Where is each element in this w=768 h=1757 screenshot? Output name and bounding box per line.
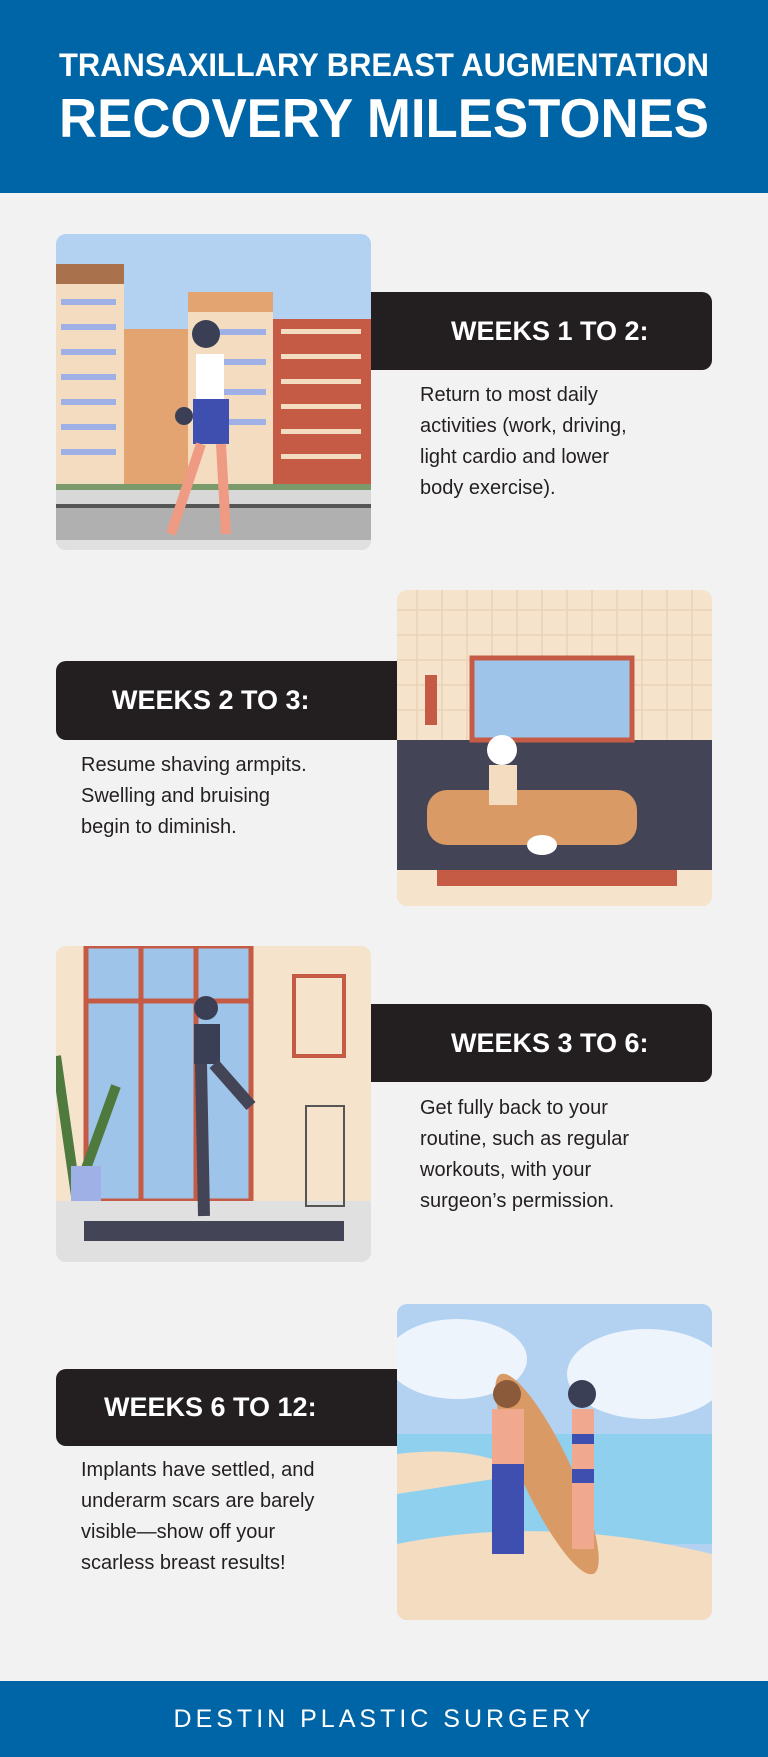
title: TRANSAXILLARY BREAST AUGMENTATION: [59, 47, 709, 83]
text block: [81, 754, 307, 838]
illustration: woman in bath: [397, 590, 712, 906]
label bar: [371, 1004, 712, 1082]
text block: surgeon’s permission.: [420, 1190, 614, 1212]
text block: Resume shaving armpits.: [81, 754, 307, 776]
title: RECOVERY MILESTONES: [59, 87, 709, 149]
label bar: WEEKS 3 TO 6:: [451, 1028, 649, 1058]
text block: visible—show off your: [81, 1521, 275, 1543]
header: [0, 0, 768, 193]
illustration: woman stretching: [56, 946, 371, 1262]
text block: begin to diminish.: [81, 816, 237, 838]
label bar: [371, 292, 712, 370]
panel: weeks 6 to 12: [56, 1304, 712, 1620]
panel: weeks 2 to 3: [56, 590, 712, 906]
title: [59, 47, 709, 149]
label bar: WEEKS 6 TO 12:: [104, 1392, 317, 1422]
text block: routine, such as regular: [420, 1128, 629, 1150]
footer: [0, 1681, 768, 1757]
panel: weeks 3 to 6: [56, 946, 712, 1262]
panel: weeks 1 to 2: [56, 234, 712, 550]
text block: underarm scars are barely: [81, 1490, 314, 1512]
text block: light cardio and lower: [420, 446, 609, 468]
text block: [81, 1459, 314, 1574]
label bar: WEEKS 2 TO 3:: [112, 685, 310, 715]
text block: Implants have settled, and: [81, 1459, 314, 1481]
footer: DESTIN PLASTIC SURGERY: [174, 1704, 594, 1732]
text block: body exercise).: [420, 477, 556, 499]
text block: Swelling and bruising: [81, 785, 270, 807]
text block: scarless breast results!: [81, 1552, 286, 1574]
illustration: woman walking in city: [56, 234, 371, 550]
illustration: couple at beach: [397, 1304, 712, 1620]
text block: [420, 1097, 629, 1212]
text block: [420, 384, 627, 499]
text block: workouts, with your: [420, 1159, 591, 1181]
label bar: WEEKS 1 TO 2:: [451, 316, 649, 346]
text block: Get fully back to your: [420, 1097, 608, 1119]
label bar: [56, 661, 397, 740]
text block: activities (work, driving,: [420, 415, 627, 437]
text block: Return to most daily: [420, 384, 598, 406]
label bar: [56, 1369, 397, 1446]
